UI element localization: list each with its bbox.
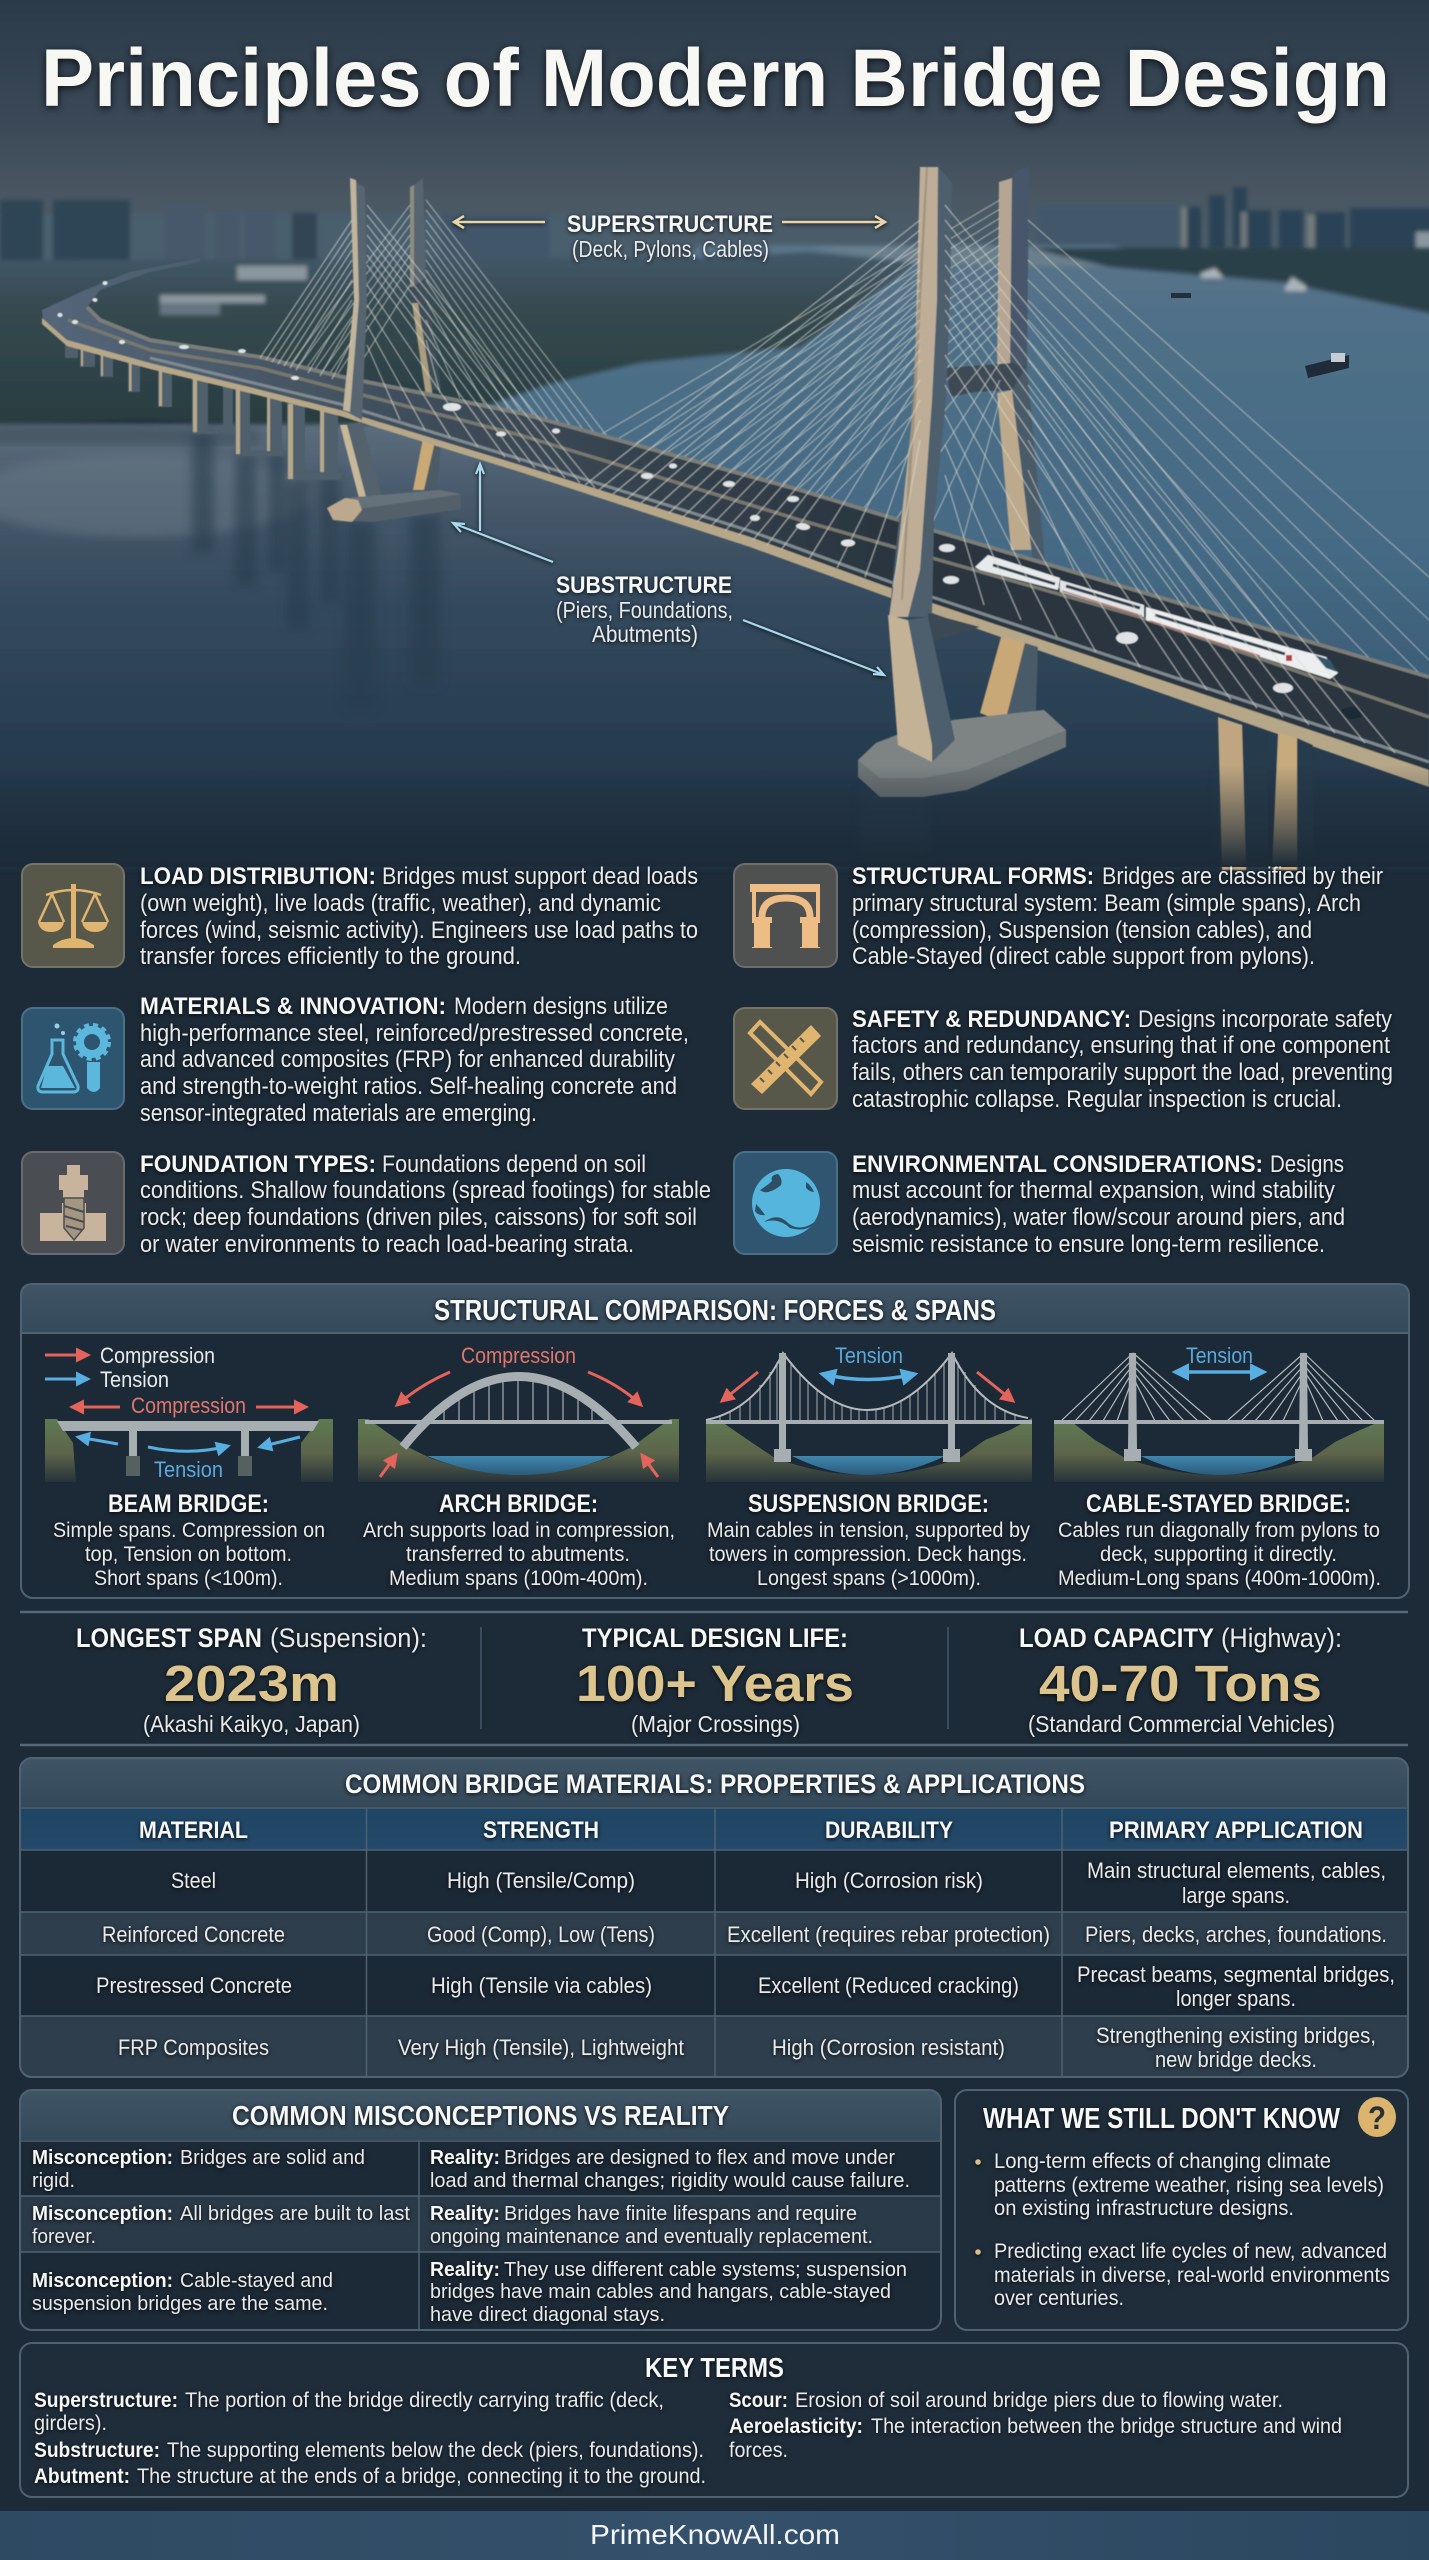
diagram: cable-stayed bridge <box>1054 1343 1384 1482</box>
table row: steel: High (Tensile/Comp) <box>447 1868 635 1893</box>
stat: longest span <box>76 1623 427 1737</box>
table row: prestressed concrete: Excellent (Reduced cracking) <box>758 1973 1019 1998</box>
misconception and reality 1: Reality: <box>430 2147 500 2169</box>
list: open questions <box>975 2150 1390 2310</box>
list: open questions: over centuries. <box>994 2287 1124 2310</box>
table row: steel: Main structural elements, cables, <box>1087 1858 1386 1883</box>
misconception and reality 1: Bridges are designed to flex and move under <box>504 2147 895 2169</box>
misconception and reality 3: have direct diagonal stays. <box>430 2304 665 2326</box>
misconception and reality 2: All bridges are built to last <box>180 2203 410 2225</box>
icon: drilled pile foundation <box>22 1152 124 1254</box>
misconception and reality 1: Bridges are solid and <box>180 2147 365 2169</box>
text: structural forms: Cable-Stayed (direct cable support from pylons). <box>852 943 1315 970</box>
stat: load capacity: (Highway): <box>1221 1623 1342 1653</box>
right tower near leg <box>889 167 1038 725</box>
text: materials and innovation: high-performance steel, reinforced/prestressed concrete, <box>140 1020 689 1047</box>
bridge structure <box>42 167 1429 870</box>
diagram: arch bridge <box>358 1343 679 1482</box>
misconception and reality 1: rigid. <box>32 2170 75 2192</box>
callout: superstructure: SUPERSTRUCTURE <box>567 211 773 238</box>
list: open questions: materials in diverse, real-world environments <box>994 2264 1390 2287</box>
text: environmental considerations: ENVIRONMENTAL CONSIDERATIONS: <box>852 1151 1263 1178</box>
text: environmental considerations: Designs <box>1270 1151 1344 1178</box>
misconception and reality 3: Reality: <box>430 2259 500 2281</box>
callout: superstructure: (Deck, Pylons, Cables) <box>572 236 769 262</box>
left bank land <box>0 252 916 428</box>
text: beam bridge: top, Tension on bottom. <box>85 1543 292 1566</box>
panel: what we still don't know <box>955 2090 1408 2330</box>
definitions left column: Superstructure: <box>34 2389 178 2412</box>
misconception and reality 3: Cable-stayed and <box>180 2270 333 2292</box>
stat: longest span: 2023m <box>164 1655 339 1712</box>
text: beam bridge: BEAM BRIDGE: <box>108 1490 269 1518</box>
text: suspension bridge <box>707 1490 1030 1590</box>
panel: key terms <box>20 2343 1408 2497</box>
icon: question mark: ? <box>1368 2100 1386 2136</box>
left tower near leg <box>340 178 382 502</box>
text: safety and redundancy: SAFETY & REDUNDANCY: <box>852 1006 1131 1033</box>
text: beam bridge: Simple spans. Compression on <box>53 1519 325 1542</box>
misconception and reality 2 <box>32 2203 873 2248</box>
callout: substructure: Abutments) <box>592 621 698 647</box>
icon: flask and gear <box>22 1008 124 1109</box>
left footing <box>327 490 461 522</box>
table row: steel <box>20 1851 1408 1912</box>
diagram: beam bridge: Tension <box>154 1457 223 1482</box>
panel: materials table <box>20 1758 1408 2077</box>
text: materials and innovation <box>140 993 689 1127</box>
panel: safety and redundancy <box>734 1006 1393 1113</box>
definitions right column: Aeroelasticity: <box>729 2415 863 2438</box>
text: materials and innovation: MATERIALS & INNOVATION: <box>140 993 446 1020</box>
definitions left column: The supporting elements below the deck (piers, foundations). <box>167 2439 704 2462</box>
legend: compression and tension <box>45 1343 215 1392</box>
text: cable-stayed bridge: Cables run diagonally from pylons to <box>1058 1519 1380 1542</box>
table row: FRP composites: Strengthening existing bridges, <box>1096 2023 1376 2048</box>
text: suspension bridge: Longest spans (>1000m). <box>757 1567 981 1590</box>
text: foundation types <box>140 1151 711 1258</box>
misconception and reality 3: Misconception: <box>32 2270 173 2292</box>
text: cable-stayed bridge: Medium-Long spans (400m-1000m). <box>1058 1567 1381 1590</box>
definitions right column: forces. <box>729 2439 788 2462</box>
text: arch bridge: ARCH BRIDGE: <box>439 1490 598 1518</box>
lower right piers <box>1218 717 1313 870</box>
text: safety and redundancy <box>852 1006 1393 1113</box>
diagram: beam bridge <box>45 1393 333 1482</box>
heading: structural comparison: STRUCTURAL COMPARISON: FORCES & SPANS <box>434 1295 996 1327</box>
deck barriers <box>87 307 1429 677</box>
stat: typical design life <box>576 1623 854 1737</box>
text: structural forms: STRUCTURAL FORMS: <box>852 863 1094 890</box>
misconception and reality 2: Reality: <box>430 2203 500 2225</box>
diagram: suspension bridge: Tension <box>835 1343 903 1368</box>
definitions left column: The structure at the ends of a bridge, connecting it to the ground. <box>137 2465 706 2488</box>
panel: load distribution <box>22 863 698 970</box>
text: suspension bridge: Main cables in tension, supported by <box>707 1519 1030 1542</box>
text: safety and redundancy: factors and redundancy, ensuring that if one component <box>852 1032 1390 1059</box>
text: structural forms: Bridges are classified by their <box>1102 863 1383 890</box>
distant skyline, land and water (soft haze) <box>0 187 1429 275</box>
train <box>975 555 1338 679</box>
table row: reinforced concrete: Good (Comp), Low (Tens) <box>427 1922 655 1947</box>
table row: reinforced concrete: Excellent (requires rebar protection) <box>727 1922 1050 1947</box>
table header row: DURABILITY <box>825 1817 953 1844</box>
callout: substructure <box>453 464 884 675</box>
icon: stone arch <box>734 864 837 967</box>
text: load distribution: Bridges must support dead loads <box>382 863 698 890</box>
panel: structural comparison <box>21 1284 1409 1598</box>
text: foundation types: conditions. Shallow foundations (spread footings) for stable <box>140 1177 711 1204</box>
left tower far leg <box>410 178 441 490</box>
text: environmental considerations: (aerodynamics), water flow/scour around piers, and <box>852 1204 1345 1231</box>
icon: question mark <box>1358 2097 1396 2137</box>
misconception and reality 3: suspension bridges are the same. <box>32 2293 328 2315</box>
diagram: cable-stayed bridge: Tension <box>1186 1343 1253 1368</box>
text: structural forms <box>852 863 1383 970</box>
definitions left column <box>34 2389 706 2488</box>
low-rise buildings <box>160 266 307 303</box>
text: arch bridge: Medium spans (100m-400m). <box>389 1567 648 1590</box>
table row: prestressed concrete <box>20 1955 1408 2016</box>
misconception and reality 2: Bridges have finite lifespans and require <box>504 2203 857 2225</box>
text: foundation types: rock; deep foundations (driven piles, caissons) for soft soil <box>140 1204 697 1231</box>
text: structural forms: (compression), Suspension (tension cables), and <box>852 917 1312 944</box>
stat: typical design life: TYPICAL DESIGN LIFE: <box>582 1623 848 1653</box>
panel: foundation types <box>22 1151 711 1258</box>
text: cable-stayed bridge <box>1058 1490 1381 1590</box>
text: environmental considerations: must account for thermal expansion, wind stability <box>852 1177 1335 1204</box>
stat: longest span: (Suspension): <box>270 1623 427 1653</box>
table row: steel: large spans. <box>1182 1883 1290 1908</box>
stat: load capacity: (Standard Commercial Vehicles) <box>1028 1711 1335 1737</box>
text: beam bridge <box>53 1490 325 1590</box>
text: load distribution: LOAD DISTRIBUTION: <box>140 863 376 890</box>
diagram: beam bridge: Compression <box>131 1393 246 1418</box>
misconception and reality 2: ongoing maintenance and eventually replacement. <box>430 2226 873 2248</box>
table row: steel: High (Corrosion risk) <box>795 1868 983 1893</box>
definitions left column: girders). <box>34 2412 107 2435</box>
list: open questions: on existing infrastructure designs. <box>994 2197 1294 2220</box>
text: load distribution: (own weight), live loads (traffic, weather), and dynamic <box>140 890 661 917</box>
footer <box>0 2511 1429 2560</box>
left water with reflections <box>0 424 1429 870</box>
heading: what we still don't know: WHAT WE STILL DON'T KNOW <box>983 2103 1341 2135</box>
text: foundation types: or water environments to reach load-bearing strata. <box>140 1231 634 1258</box>
misconception and reality 2: Misconception: <box>32 2203 173 2225</box>
table row: FRP composites: High (Corrosion resistant) <box>772 2035 1005 2060</box>
text: environmental considerations: seismic resistance to ensure long-term resilience. <box>852 1231 1325 1258</box>
diagram: suspension bridge <box>706 1343 1032 1482</box>
far cables <box>290 200 1429 674</box>
text: load distribution: transfer forces efficiently to the ground. <box>140 943 521 970</box>
title: Principles of Modern Bridge Design <box>41 33 1390 124</box>
definitions right column: The interaction between the bridge structure and wind <box>871 2415 1342 2438</box>
legend: compression and tension: Compression <box>100 1343 215 1368</box>
table row: reinforced concrete: Piers, decks, arches, foundations. <box>1085 1922 1387 1947</box>
table row: prestressed concrete: High (Tensile via cables) <box>431 1973 652 1998</box>
deck edge beam <box>42 318 1429 787</box>
text: suspension bridge: towers in compression. Deck hangs. <box>709 1543 1027 1566</box>
vehicles <box>58 281 1293 693</box>
table header row: PRIMARY APPLICATION <box>1109 1817 1363 1844</box>
table row: reinforced concrete <box>20 1912 1408 1955</box>
panel: structural forms <box>734 863 1383 970</box>
text: load distribution <box>140 863 698 970</box>
hero photo: cable-stayed bridge over river <box>0 0 1429 870</box>
ships <box>1171 293 1349 378</box>
panel: misconceptions vs reality <box>20 2090 941 2330</box>
icon: globe with wave <box>734 1152 837 1254</box>
heading: misconceptions: COMMON MISCONCEPTIONS VS REALITY <box>232 2100 729 2131</box>
text: suspension bridge: SUSPENSION BRIDGE: <box>748 1490 989 1518</box>
misconception and reality 3: bridges have main cables and hangars, cable-stayed <box>430 2281 891 2303</box>
icon: balance scale <box>22 864 124 967</box>
text: foundation types: Foundations depend on soil <box>382 1151 646 1178</box>
text: materials and innovation: Modern designs utilize <box>454 993 668 1020</box>
near cables <box>260 205 1395 753</box>
table row: FRP composites: FRP Composites <box>118 2035 269 2060</box>
callout: superstructure <box>454 211 885 262</box>
stat: load capacity: 40-70 Tons <box>1039 1655 1322 1712</box>
list: open questions: Predicting exact life cycles of new, advanced <box>994 2240 1387 2263</box>
table header row: STRENGTH <box>483 1817 599 1844</box>
definitions right column <box>729 2389 1342 2462</box>
text: arch bridge: transferred to abutments. <box>406 1543 630 1566</box>
misconception and reality 3: They use different cable systems; suspension <box>504 2259 907 2281</box>
footer: PrimeKnowAll.com <box>590 2519 840 2550</box>
text: materials and innovation: and advanced composites (FRP) for enhanced durability <box>140 1046 675 1073</box>
definitions right column: Erosion of soil around bridge piers due to flowing water. <box>795 2389 1283 2412</box>
callout: substructure: (Piers, Foundations, <box>556 597 733 623</box>
text: foundation types: FOUNDATION TYPES: <box>140 1151 376 1178</box>
river <box>380 245 1429 800</box>
misconception and reality 1 <box>32 2147 910 2192</box>
definitions left column: The portion of the bridge directly carrying traffic (deck, <box>185 2389 664 2412</box>
misconception and reality 1: load and thermal changes; rigidity would cause failure. <box>430 2170 910 2192</box>
definitions left column: Substructure: <box>34 2439 160 2462</box>
table row: FRP composites: Very High (Tensile), Lightweight <box>398 2035 684 2060</box>
table header row: MATERIAL <box>139 1817 248 1844</box>
table header row <box>20 1808 1408 1850</box>
table row: FRP composites: new bridge decks. <box>1155 2047 1317 2072</box>
misconception and reality 1: Misconception: <box>32 2147 173 2169</box>
right footing <box>858 615 1066 797</box>
table row: reinforced concrete: Reinforced Concrete <box>102 1922 285 1947</box>
table row: prestressed concrete: longer spans. <box>1176 1986 1296 2011</box>
table row: FRP composites <box>20 2016 1408 2077</box>
heading: key terms: KEY TERMS <box>645 2352 784 2383</box>
text: beam bridge: Short spans (<100m). <box>94 1567 283 1590</box>
table row: steel: Steel <box>171 1868 216 1893</box>
text: arch bridge <box>363 1490 675 1590</box>
misconception and reality 2: forever. <box>32 2226 96 2248</box>
stat: longest span: (Akashi Kaikyo, Japan) <box>143 1711 360 1737</box>
legend: compression and tension: Tension <box>100 1367 169 1392</box>
list: open questions: Long-term effects of changing climate <box>994 2150 1331 2173</box>
approach piers <box>65 340 342 480</box>
text: materials and innovation: and strength-to-weight ratios. Self-healing concrete and <box>140 1073 677 1100</box>
right tower far leg <box>946 167 1045 563</box>
stat: typical design life: (Major Crossings) <box>631 1711 800 1737</box>
hero fade to page background <box>0 765 1429 867</box>
list: open questions: patterns (extreme weather, rising sea levels) <box>994 2174 1384 2197</box>
icon: crossed rulers <box>734 1008 837 1109</box>
stat: typical design life: 100+ Years <box>576 1655 854 1712</box>
text: cable-stayed bridge: CABLE-STAYED BRIDGE: <box>1086 1490 1351 1518</box>
stat: load capacity <box>1019 1623 1342 1737</box>
text: arch bridge: Arch supports load in compression, <box>363 1519 675 1542</box>
stats band <box>20 1612 1408 1745</box>
stat: longest span: LONGEST SPAN <box>76 1623 262 1653</box>
text: load distribution: forces (wind, seismic activity). Engineers use load paths to <box>140 917 698 944</box>
heading: materials table: COMMON BRIDGE MATERIALS: PROPERTIES & APPLICATIONS <box>345 1769 1085 1799</box>
panel: materials and innovation <box>22 993 689 1127</box>
road deck <box>42 258 1429 770</box>
definitions right column: Scour: <box>729 2389 788 2412</box>
text: safety and redundancy: Designs incorporate safety <box>1138 1006 1392 1033</box>
text: materials and innovation: sensor-integrated materials are emerging. <box>140 1100 537 1127</box>
right bank land <box>1030 248 1429 315</box>
stat: load capacity: LOAD CAPACITY <box>1019 1623 1214 1653</box>
diagram: arch bridge: Compression <box>461 1343 576 1368</box>
table row: prestressed concrete: Precast beams, segmental bridges, <box>1077 1962 1395 1987</box>
text: cable-stayed bridge: deck, supporting it directly. <box>1100 1543 1337 1566</box>
text: environmental considerations <box>852 1151 1345 1258</box>
text: safety and redundancy: catastrophic collapse. Regular inspection is crucial. <box>852 1086 1342 1113</box>
definitions left column: Abutment: <box>34 2465 130 2488</box>
panel: environmental considerations <box>734 1151 1345 1258</box>
misconception and reality 3 <box>32 2259 907 2326</box>
text: structural forms: primary structural system: Beam (simple spans), Arch <box>852 890 1361 917</box>
callout: substructure: SUBSTRUCTURE <box>556 572 732 599</box>
table row: prestressed concrete: Prestressed Concrete <box>96 1973 292 1998</box>
